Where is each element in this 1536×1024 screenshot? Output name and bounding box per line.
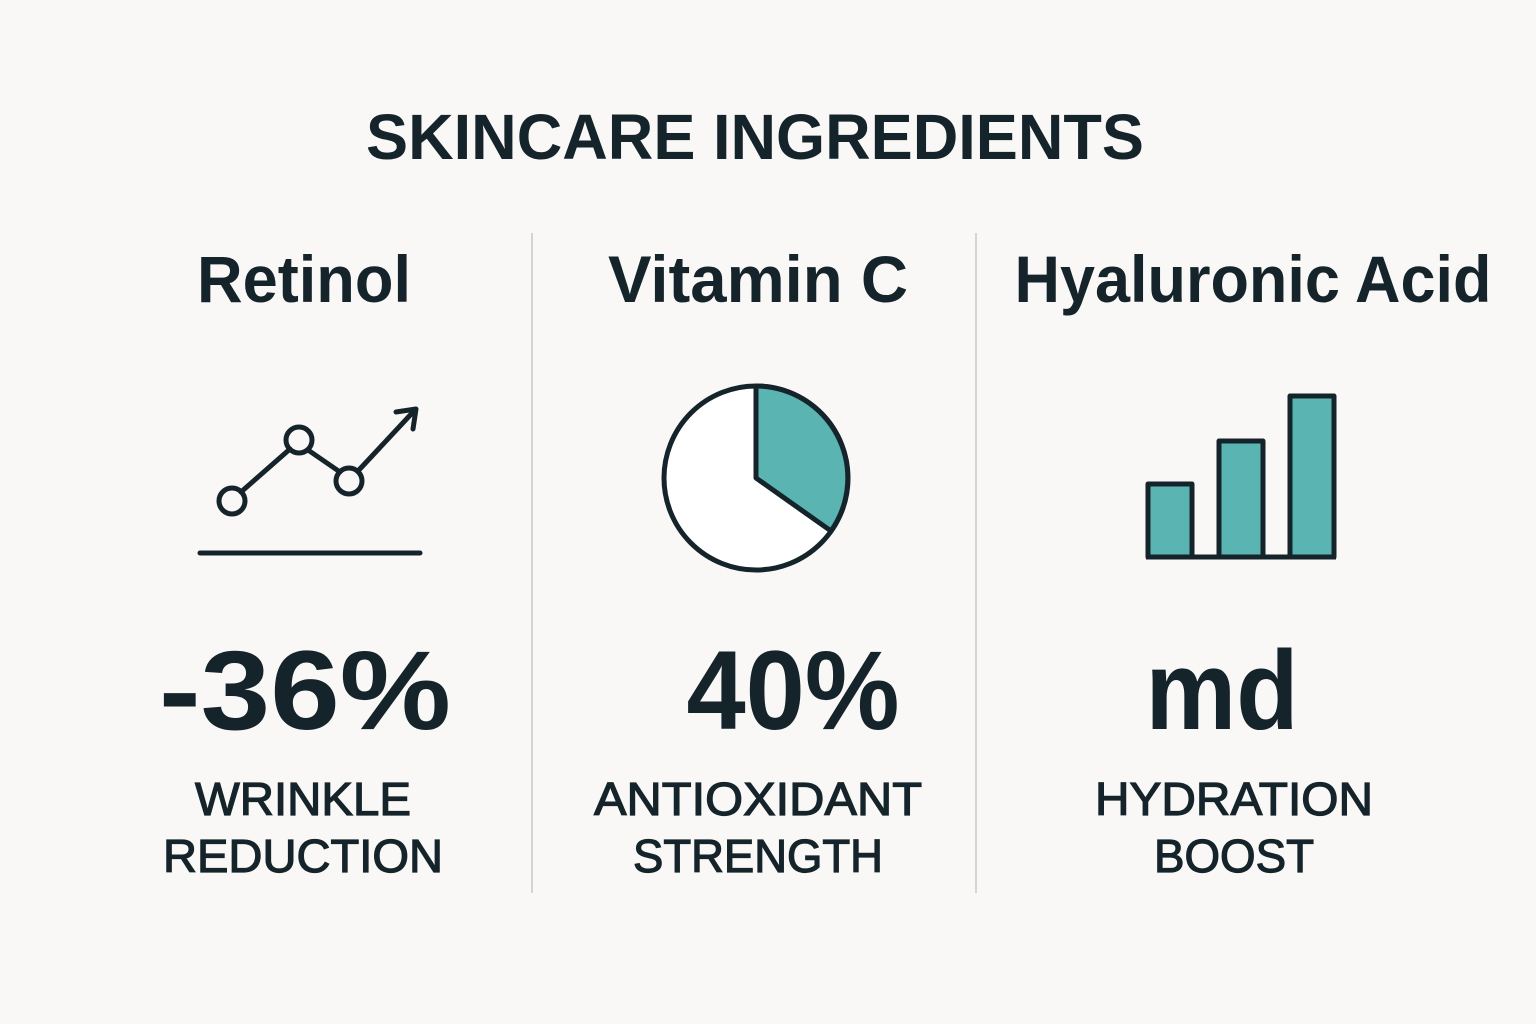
label: antioxidant strength: STRENGTH	[633, 830, 883, 882]
icon: line chart	[200, 409, 420, 553]
icon: bar chart	[1146, 396, 1336, 557]
stat: md: md	[1146, 628, 1298, 753]
label: antioxidant strength: ANTIOXIDANT	[594, 773, 922, 825]
panel: retinol	[159, 242, 451, 882]
title: SKINCARE INGREDIENTS	[366, 101, 1144, 173]
icon: pie chart	[664, 386, 848, 570]
label: wrinkle reduction: REDUCTION	[163, 830, 443, 882]
panel: vitamin c	[594, 242, 922, 882]
panel: hyaluronic acid	[1014, 242, 1492, 882]
heading: hyaluronic acid: Hyaluronic Acid	[1014, 242, 1492, 316]
stat: 40%: 40%	[686, 628, 900, 753]
stat: -36%: -36%	[159, 628, 451, 753]
label: hydration boost: BOOST	[1154, 830, 1314, 882]
label: hydration boost	[1095, 773, 1373, 882]
label: wrinkle reduction	[163, 773, 443, 882]
label: hydration boost: HYDRATION	[1095, 773, 1373, 825]
heading: vitamin c: Vitamin C	[608, 242, 908, 316]
label: antioxidant strength	[594, 773, 922, 882]
heading: retinol: Retinol	[197, 242, 411, 316]
label: wrinkle reduction: WRINKLE	[195, 773, 411, 825]
